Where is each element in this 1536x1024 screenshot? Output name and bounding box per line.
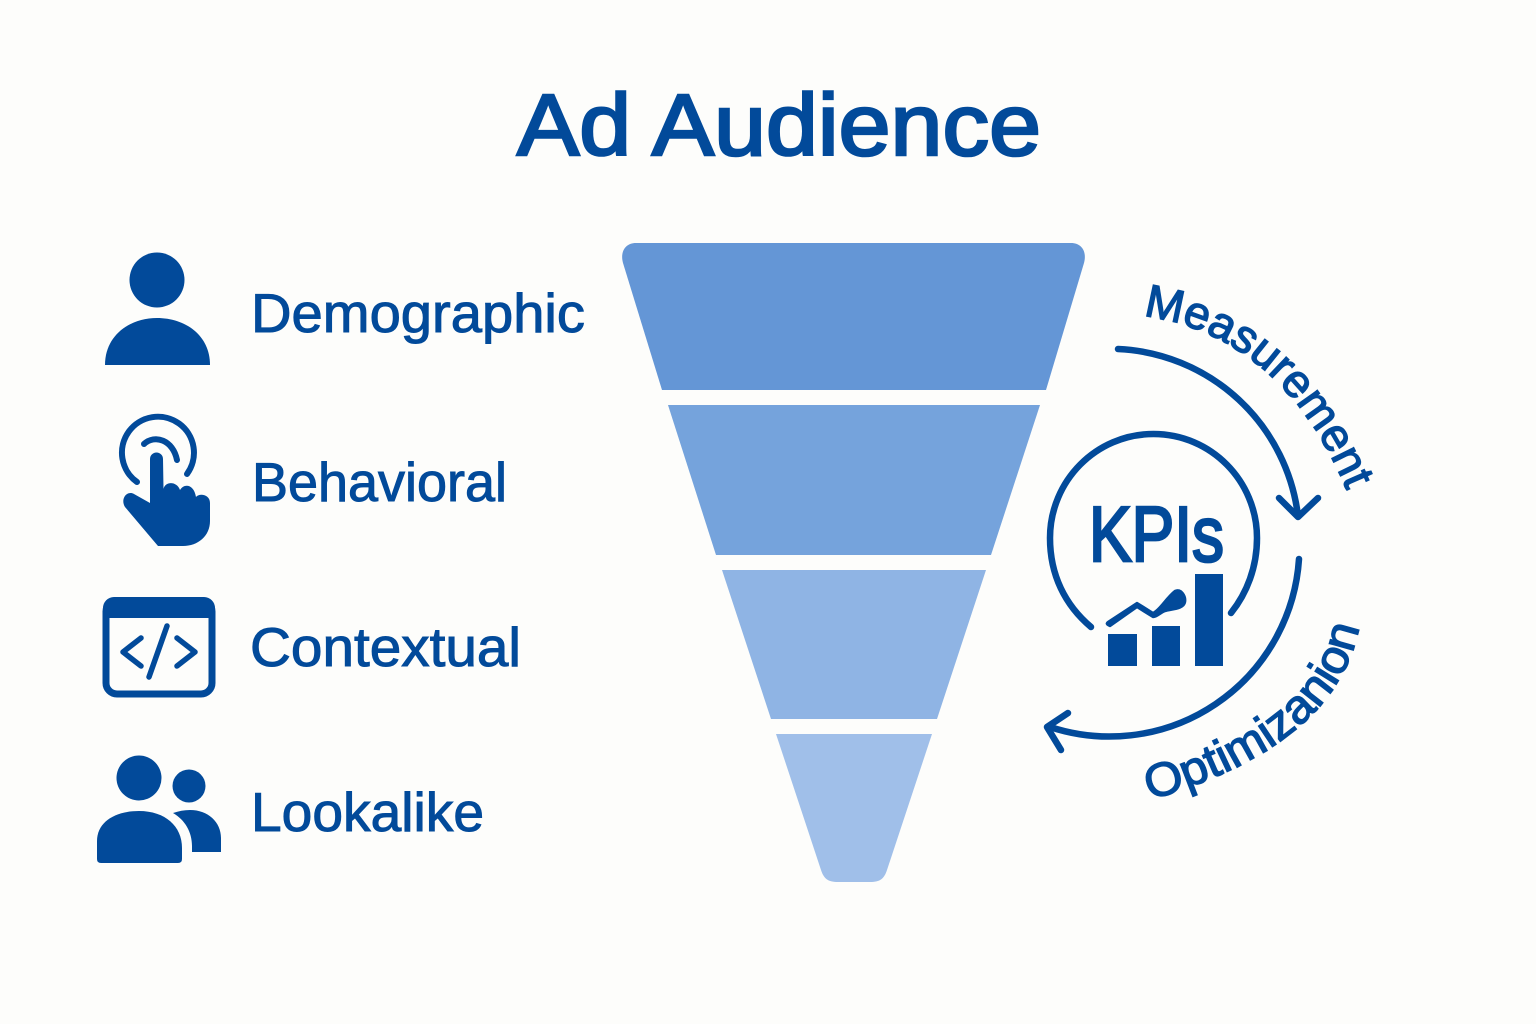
funnel segment 2	[668, 405, 1040, 555]
label: Lookalike: Lookalike	[251, 781, 484, 843]
label: Behavioral: Behavioral	[252, 451, 507, 513]
icon: demographic person	[105, 252, 210, 365]
funnel segment 1	[622, 243, 1085, 390]
curved label: Measurement: Measurement	[1146, 284, 1373, 491]
icon: contextual code window	[103, 597, 215, 694]
icon: KPI bar chart with trend line	[1107, 574, 1223, 666]
title: Ad Audience	[517, 77, 1041, 174]
KPI ring	[1050, 434, 1257, 627]
label: Demographic: Demographic	[251, 282, 585, 344]
label: Contextual: Contextual	[250, 616, 521, 678]
KPIs text: KPIs	[1089, 490, 1224, 578]
icon: lookalike people	[97, 756, 221, 863]
arrow: measurement	[1118, 349, 1318, 517]
funnel segment 3	[722, 570, 986, 719]
curved label: Optimizanion: Optimizanion	[1146, 624, 1360, 798]
funnel segment 4	[776, 734, 932, 882]
icon: behavioral pointing hand	[122, 417, 210, 546]
arrow: optimization	[1047, 559, 1299, 750]
funnel	[622, 243, 1085, 882]
